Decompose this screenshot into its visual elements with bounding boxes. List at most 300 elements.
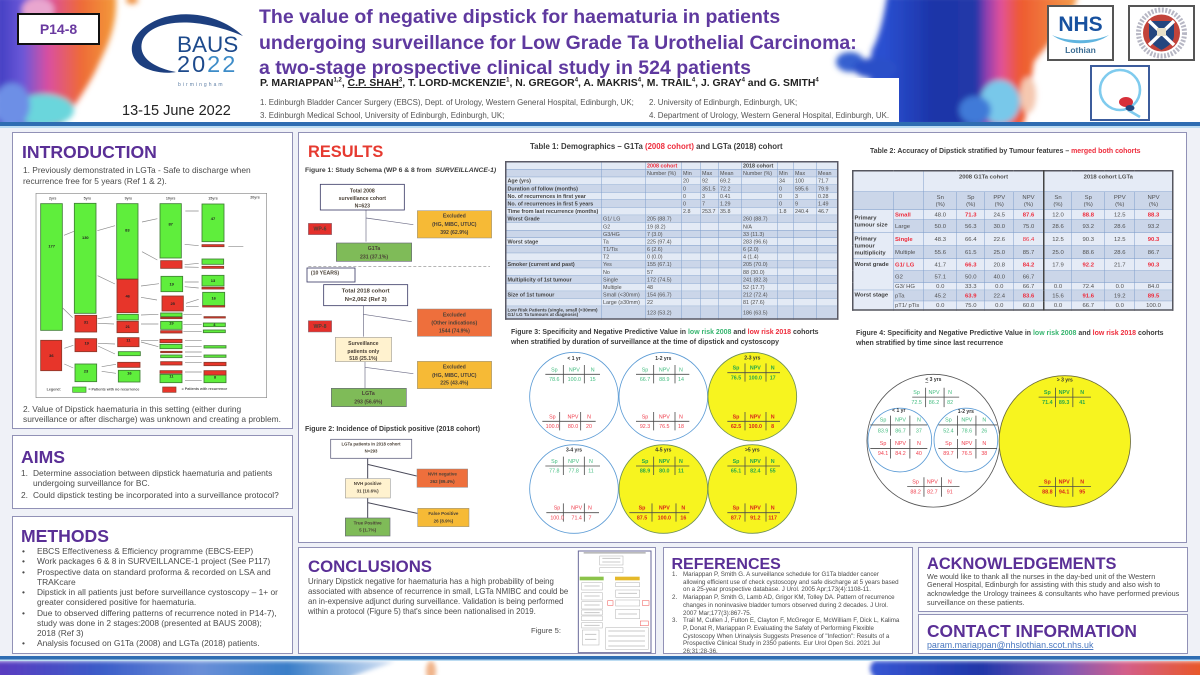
chart: recurrence flow diagram: 11 — [169, 373, 174, 378]
text: bullet dots — [22, 546, 25, 648]
figure 1: study schema title: Figure 1: Study Schema (WP 6 & 8 from SURVEILLANCE-1) — [305, 167, 496, 174]
circle: 3-4 years: N — [588, 506, 592, 512]
circle: 1-2 years: N — [982, 441, 986, 447]
figure 2: incidence flowchart: 5 (1.7%) — [359, 528, 377, 533]
circle: 1-2 years: 52.4 — [943, 429, 954, 435]
figure 4: time since recurrence circles — [866, 374, 1131, 508]
circle: over 5 years (highlighted): 87.7 — [731, 515, 741, 521]
circle: 4-5 years (highlighted): Sp — [642, 459, 649, 465]
text: acknowledgements: surveillance on these patients. — [927, 598, 1025, 607]
table 2: dipstick accuracy: 0.0 — [1116, 302, 1124, 308]
circle: up to 3 years: N — [948, 479, 952, 485]
table 2: dipstick accuracy: 61.5 — [965, 249, 976, 255]
text: bullet dots: • — [22, 556, 25, 566]
table 1: demographics: 1.49 — [818, 200, 829, 207]
table 1: demographics: 6 (2.0) — [743, 246, 759, 252]
text: methods list — [37, 546, 278, 648]
text: methods list: greater considered positive for haematuria. — [37, 597, 196, 607]
table 1: demographics: 225 (97.4) — [647, 238, 672, 245]
circle: 2-3 years (highlighted): 76.5 — [731, 375, 741, 381]
table 2: dipstick accuracy: 90.3 — [1083, 236, 1094, 242]
circle: 1-2 years: NPV — [961, 441, 973, 447]
table 2: dipstick accuracy: (%) — [995, 201, 1004, 207]
table 2: dipstick accuracy: 88.3 — [1148, 211, 1159, 218]
title: undergoing surveillance for Low Grade Ta Urothelial Carcinoma: — [259, 32, 857, 54]
text: aims list: 1. — [21, 468, 28, 478]
table 1: demographics: 283 (96.6) — [743, 238, 768, 245]
chart: recurrence flow diagram: = Patients with no recurrence — [88, 387, 139, 391]
circle: under 1 year: 37 — [916, 429, 922, 435]
table 1: demographics: Ta — [603, 238, 609, 245]
circle: 1-2 years — [619, 352, 708, 441]
chart: recurrence flow diagram: 21 — [125, 324, 130, 328]
circle: 2-3 years (highlighted) — [708, 352, 797, 441]
figure 1: study schema flowchart: (10 YEARS) — [311, 271, 339, 277]
table 2: dipstick accuracy: 66.7 — [1023, 273, 1034, 280]
table 1: demographics: 33 (11.3) — [743, 231, 764, 237]
text: methods list: Prospective data on standard proforma & recorded on LSA and — [37, 566, 271, 576]
text: figure 5 label: Figure 5: — [531, 626, 561, 635]
table 2: dipstick accuracy: 28.6 — [1052, 223, 1064, 229]
circle: under 1 year: NPV — [568, 414, 579, 420]
text: bullet dots: • — [22, 587, 25, 597]
table 2: dipstick accuracy: 0.0 — [936, 283, 944, 290]
circle: under 1 year — [530, 352, 618, 441]
table 2: dipstick accuracy: 22.4 — [994, 292, 1005, 299]
table 1: demographics: 0 — [683, 185, 686, 191]
table 2: dipstick accuracy: 66.7 — [1083, 302, 1094, 308]
circle: 4-5 years (highlighted): N — [681, 506, 685, 512]
title: The value of negative dipstick for haematuria in patients — [259, 6, 780, 28]
table 2: dipstick accuracy: NPV — [1147, 194, 1160, 200]
table 1: demographics: 0 — [683, 200, 686, 207]
table 2: dipstick accuracy: Worst grade — [854, 261, 889, 268]
table 1: demographics: Number (%) — [743, 170, 772, 176]
table 1: demographics: Large (≥30mm) — [603, 299, 640, 305]
text: methods list: 2018 (Ref 3) — [37, 628, 84, 638]
text: conclusions: within a protocol (Figure 5) that's since been nationalised in 2019. — [308, 607, 536, 616]
circle: 4-5 years (highlighted): NPV — [659, 459, 670, 465]
circle: up to 3 years: 88.2 — [910, 489, 921, 495]
circle: under 1 year: Sp — [880, 418, 886, 424]
text: aims list — [21, 468, 279, 500]
table 1: demographics: 172 (74.5) — [647, 276, 672, 283]
heading: acknowledgements: ACKNOWLEDGEMENTS — [927, 555, 1116, 573]
text: references list: changes in noninvasive bladder tumors observed during 2 decades. J Urol. — [683, 602, 888, 609]
table 1: demographics: T2 — [603, 254, 609, 260]
table 1: demographics: 46.7 — [818, 208, 829, 214]
circle: 2-3 years (highlighted): 17 — [770, 375, 776, 381]
table 1: demographics: 154 (66.7) — [647, 292, 672, 298]
circle: over 5 years (highlighted): 82.4 — [750, 469, 761, 475]
circle: 1-2 years: 38 — [981, 451, 987, 457]
table 2: dipstick accuracy: G1/ LG — [895, 261, 914, 268]
chart: recurrence flow diagram: 130 — [81, 234, 89, 240]
table 2: dipstick accuracy: 85.7 — [1023, 249, 1034, 255]
text: bullet dots: • — [22, 638, 25, 648]
table 1: demographics: 19 (8.2) — [647, 223, 666, 229]
footer rule and paint splash band — [0, 656, 1200, 675]
BAUS 2022 logo: 2022 — [177, 51, 237, 77]
circle: under 1 year — [868, 408, 932, 472]
table 2: dipstick accuracy: (%) — [966, 201, 975, 207]
figure 2: incidence flowchart: 262 (89.4%) — [430, 479, 455, 484]
table 1: demographics: 0 — [683, 193, 686, 199]
text: reference numbers: 3. — [672, 617, 677, 624]
BAUS 2022 logo: birmingham — [178, 82, 225, 88]
table 2: dipstick accuracy: (%) — [1024, 201, 1033, 207]
circle: 3-4 years: NPV — [568, 459, 580, 465]
table 1: demographics: 6 (2.6) — [647, 246, 663, 252]
table 2: dipstick accuracy: 0.0 — [995, 283, 1003, 290]
text: methods list: Work packages 6 & 8 in SURVEILLANCE-1 project (See P117) — [37, 556, 270, 566]
table 2: dipstick accuracy: 90.3 — [1148, 236, 1159, 242]
text: methods list: TRAKcare — [37, 577, 76, 587]
circle: 1-2 years: N — [679, 414, 683, 420]
table 2: dipstick accuracy: 75.0 — [965, 302, 976, 308]
figure 2: incidence flowchart: True Positive — [354, 520, 382, 525]
table 2: dipstick accuracy: Primary tumour multiplicity — [854, 236, 886, 256]
circle: up to 3 years: N — [948, 390, 952, 396]
table 2: dipstick accuracy: 55.6 — [935, 249, 946, 255]
table 2: dipstick accuracy: 28.6 — [1114, 249, 1125, 255]
table 1: demographics: 7 — [702, 200, 705, 207]
table 1: demographics: Duration of follow (months) — [508, 185, 578, 191]
chart: recurrence flow diagram: 16 — [127, 370, 132, 375]
text: intro point 1: recurrence free for 5 years (Ref 1 & 2). — [23, 176, 167, 186]
table 1: demographics: 0 — [779, 185, 782, 191]
circle: over 5 years (highlighted): Sp — [733, 506, 740, 512]
table 1: demographics: 351.5 — [702, 185, 716, 191]
circle: under 1 year: 20 — [586, 424, 592, 430]
figure 3 title: Figure 3: Specificity and Negative Predictive Value in low risk 2008 and low risk 2018 cohorts — [511, 329, 819, 336]
circle: over 3 years (highlighted): NPV — [1059, 479, 1070, 485]
table 1: demographics: 0 — [779, 200, 782, 207]
circle: 3-4 years: 77.8 — [568, 469, 579, 475]
panel: contact information — [918, 614, 1188, 654]
circle: under 1 year: N — [917, 418, 921, 424]
circle: under 1 year: N — [591, 367, 595, 373]
table 1: demographics: 205 (70.0) — [743, 261, 768, 267]
circle: 3-4 years: 71.4 — [571, 515, 582, 521]
table 1: demographics: No — [603, 269, 610, 275]
BAUS 2022 logo — [122, 14, 243, 119]
chart: recurrence flow diagram: 9yrs — [124, 196, 132, 200]
figure 1: study schema flowchart: N=623 — [355, 203, 370, 209]
table 2: dipstick accuracy: 63.9 — [965, 292, 976, 299]
figure 1: study schema flowchart: 293 (56.6%) — [354, 399, 383, 405]
panel: conclusions — [298, 547, 656, 654]
circle: 3-4 years: 77.8 — [549, 469, 560, 475]
chart: recurrence flow diagram: 87 — [168, 221, 173, 226]
circle: over 3 years (highlighted): 95 — [1079, 489, 1085, 495]
table 2: dipstick accuracy: G2 — [895, 273, 903, 280]
text: contact email: param.mariappan@nhslothian.scot.nhs.uk — [927, 640, 1093, 650]
table 2: dipstick accuracy: 0.0 — [1054, 283, 1062, 290]
table 2: dipstick accuracy: pT1/ pTis — [895, 302, 919, 308]
circle: 4-5 years (highlighted): 87.5 — [637, 515, 647, 521]
chart: recurrence flow diagram — [36, 193, 267, 398]
circle: over 5 years (highlighted): 65.1 — [731, 469, 741, 475]
table 2: dipstick accuracy: 12.5 — [1114, 211, 1125, 218]
table 1: demographics: 35.8 — [720, 208, 731, 214]
circle: 3-4 years: 7 — [589, 515, 592, 521]
table 1: demographics: 595.6 — [795, 185, 809, 191]
circle: 1-2 years — [934, 408, 998, 472]
table 1: demographics: 81 (27.6) — [743, 299, 765, 305]
circle: 4-5 years (highlighted): 4-5 yrs — [655, 447, 672, 453]
circle: over 5 years (highlighted): 55 — [770, 469, 776, 475]
table 2: dipstick accuracy: (%) — [936, 201, 945, 207]
figure 1: study schema flowchart: patients only — [347, 349, 379, 355]
table 2: dipstick accuracy: 88.6 — [1083, 249, 1094, 255]
table 2: dipstick accuracy: 41.7 — [935, 261, 946, 268]
circle: up to 3 years: Sp — [912, 479, 919, 485]
circle: 2-3 years (highlighted): 8 — [771, 424, 774, 430]
table 2: dipstick accuracy: Large — [895, 223, 910, 229]
circle: 1-2 years: Sp — [642, 367, 648, 373]
circle: 3-4 years: 100.0 — [550, 515, 564, 521]
table 2: dipstick accuracy: 93.2 — [1083, 223, 1094, 229]
table 1: demographics: 0 (0.0) — [647, 254, 663, 260]
circle: over 3 years (highlighted): Sp — [1044, 390, 1052, 396]
text: reference numbers: 2. — [672, 594, 677, 601]
circle: 4-5 years (highlighted): 80.0 — [659, 469, 670, 475]
figure 1: study schema flowchart: Excluded — [443, 313, 466, 319]
text: references list — [683, 571, 900, 655]
table 2: dipstick accuracy: 15.6 — [1052, 292, 1064, 299]
table 2: dipstick accuracy: 89.5 — [1148, 292, 1159, 299]
text: references list: Prospective Clinical Study in 2350 patients. Eur Urol Open Sci. 2021 Jul — [683, 640, 880, 647]
table 1 title: Table 1: Demographics – G1Ta (2008 cohort) and LGTa (2018) cohort — [530, 142, 783, 151]
table 1: demographics: Size of 1st tumour — [508, 292, 554, 298]
table 1: demographics: 1.8 — [779, 208, 787, 214]
text: references list: P, Donat R, Mariappan P. Evaluating the Safety of Performing Flexible — [683, 625, 874, 632]
circle: up to 3 years: 91 — [947, 489, 953, 495]
circle: 1-2 years: 66.7 — [640, 377, 650, 383]
chart: recurrence flow diagram: 15yrs — [208, 196, 217, 200]
text: acknowledgements: We would like to thank all the nurses in the day-bed unit of the Western — [927, 572, 1155, 580]
heading: references: REFERENCES — [672, 556, 781, 572]
circle: 3-4 years: Sp — [554, 506, 560, 512]
circle: over 3 years (highlighted): 71.4 — [1042, 400, 1053, 406]
table 2 title: Table 2: Accuracy of Dipstick stratified by Tumour features – merged both cohorts — [870, 148, 1141, 155]
table 2: dipstick accuracy: 45.2 — [935, 292, 946, 299]
logo: NHS Lothian — [1047, 5, 1114, 61]
circle: 3-4 years: 3-4 yrs — [566, 447, 582, 453]
table 1: demographics: Number (%) — [647, 170, 676, 176]
circle: 1-2 years: Sp — [945, 418, 952, 424]
affiliations: 2. University of Edinburgh, Edinburgh, UK; — [649, 98, 797, 107]
logo: NHS Lothian: Lothian — [1065, 45, 1096, 55]
text: intro point 2: 2. Value of Dipstick haematuria in this setting (either during — [23, 404, 241, 414]
table 2: dipstick accuracy: 88.8 — [1083, 211, 1094, 218]
table 2: dipstick accuracy: Sn — [1054, 194, 1062, 200]
figure 1: study schema flowchart: Excluded — [443, 365, 466, 371]
header band with paint splashes — [0, 0, 1200, 122]
figure 1: study schema flowchart: WP-8 — [314, 324, 327, 330]
table 1: demographics: Small (<30mm) — [603, 292, 640, 298]
table 2: dipstick accuracy: 86.4 — [1023, 236, 1034, 242]
text: intro point 2 — [23, 404, 281, 424]
text: reference numbers — [672, 571, 677, 624]
table 1: demographics: Worst stage — [508, 238, 538, 245]
panel: results — [298, 132, 1187, 543]
table 2: dipstick accuracy: 87.6 — [1023, 211, 1034, 218]
text: acknowledgements: General Hospital, Edinburgh for assisting with this study and also wish to — [927, 580, 1160, 589]
table 2: dipstick accuracy: 24.5 — [994, 211, 1005, 218]
circle: under 1 year: N — [917, 441, 921, 447]
table 2: dipstick accuracy: 22.6 — [994, 236, 1005, 242]
panel: aims — [12, 435, 293, 509]
figure 1: study schema flowchart: G1Ta — [368, 246, 380, 252]
figure 1: study schema flowchart: (Other indications) — [431, 320, 478, 326]
text: acknowledgements — [927, 572, 1179, 607]
circle: up to 3 years — [867, 374, 1000, 507]
table 2: dipstick accuracy: 84.2 — [1023, 261, 1034, 268]
table 1: demographics: 9 — [795, 200, 798, 207]
table 1: demographics: 2008 cohort — [647, 163, 677, 169]
circle: 1-2 years: 78.6 — [962, 429, 972, 435]
heading: contact information: CONTACT INFORMATION — [927, 621, 1137, 641]
table 1: demographics: Min — [779, 170, 788, 176]
table 1: demographics: Worst Grade — [508, 216, 540, 222]
text: intro point 1: 1. Previously demonstrated in LGTa - Safe to discharge when — [23, 165, 251, 175]
table 2: dipstick accuracy: 0.0 — [1054, 302, 1062, 308]
table 1: demographics: No. of recurrences in first year — [508, 193, 586, 199]
circle: 1-2 years: NPV — [659, 414, 670, 420]
circle: under 1 year: 94.1 — [878, 451, 888, 457]
table 2: dipstick accuracy: PPV — [1114, 194, 1126, 200]
chart: recurrence flow diagram: 13 — [210, 278, 215, 282]
circle: over 3 years (highlighted): 89.3 — [1059, 400, 1069, 406]
table 2: dipstick accuracy: 56.3 — [965, 223, 976, 229]
figure 5: protocol thumbnail — [578, 550, 652, 654]
circle: 1-2 years: 26 — [981, 429, 987, 435]
circle: under 1 year: 84.2 — [895, 451, 906, 457]
white box for authors — [255, 78, 899, 122]
circle: under 1 year: 100.0 — [568, 377, 581, 383]
table 2: dipstick accuracy: 12.5 — [1052, 236, 1064, 242]
table 1: demographics: 186 (63.5) — [743, 309, 768, 315]
chart: recurrence flow diagram: 11 — [126, 337, 131, 342]
circle: 1-2 years: 1-2 yrs — [958, 409, 974, 415]
circle: under 1 year: < 1 yr — [892, 408, 905, 414]
table 2: dipstick accuracy — [852, 170, 1174, 311]
table 2: dipstick accuracy: 83.6 — [1023, 292, 1034, 299]
table 2: dipstick accuracy: 66.3 — [965, 261, 976, 268]
circle: over 3 years (highlighted) — [999, 376, 1131, 507]
circle: 4-5 years (highlighted): 16 — [680, 515, 686, 521]
table 2: dipstick accuracy: 20.8 — [994, 261, 1005, 268]
text: references list: Cystoscopy When Urinalysis Suggests Presence of "Infection": Results of a — [683, 633, 889, 640]
circle: 1-2 years: N — [679, 367, 683, 373]
figure 1: study schema flowchart: Surveillance — [348, 341, 379, 347]
table 1: demographics: 253.7 — [702, 208, 716, 214]
table 2: dipstick accuracy: Sn — [937, 194, 944, 200]
text: methods list: EBCS Effectiveness & Efficiency programme (EBCS-EEP) — [37, 546, 253, 556]
circle: 3-4 years: 11 — [588, 469, 594, 475]
circle: up to 3 years: Sp — [913, 390, 920, 396]
circle: 2-3 years (highlighted): Sp — [733, 366, 740, 372]
panel: introduction — [12, 132, 293, 429]
table 2: dipstick accuracy: 84.0 — [1148, 283, 1159, 290]
table 2: dipstick accuracy: 66.7 — [1023, 283, 1034, 290]
circle: 2-3 years (highlighted): NPV — [750, 414, 761, 420]
circle: 1-2 years: 76.5 — [659, 424, 670, 430]
chart: recurrence flow diagram: 36 — [49, 352, 54, 358]
circle: over 3 years (highlighted): 94.1 — [1059, 489, 1069, 495]
table 2: dipstick accuracy: 91.6 — [1083, 292, 1094, 299]
circle: over 3 years (highlighted): Sp — [1044, 479, 1052, 485]
table 2: dipstick accuracy: 0.0 — [936, 302, 944, 308]
circle: up to 3 years: NPV — [927, 479, 938, 485]
table 1: demographics: 79.9 — [818, 185, 829, 191]
circle: 2-3 years (highlighted): 100.0 — [749, 375, 762, 381]
panel: methods — [12, 516, 293, 654]
figure 1: study schema flowchart: surveillance cohort — [339, 196, 386, 202]
circle: 1-2 years: 89.7 — [943, 451, 954, 457]
table 2: dipstick accuracy: 19.2 — [1114, 292, 1125, 299]
circle: 1-2 years: N — [982, 418, 986, 424]
table 2: dipstick accuracy: Worst stage — [854, 291, 888, 298]
figure 4 title — [856, 330, 1164, 347]
circle: over 3 years (highlighted): N — [1080, 390, 1084, 396]
circle: 1-2 years: Sp — [642, 414, 648, 420]
circle: 4-5 years (highlighted): 11 — [678, 469, 684, 475]
circle: 4-5 years (highlighted): 88.9 — [640, 469, 650, 475]
figure 3 title — [511, 328, 819, 346]
chart: recurrence flow diagram: 10yrs — [165, 196, 175, 200]
affiliations: 4. Department of Urology, Western General Hospital, Edinburgh, UK. — [649, 111, 889, 120]
table 2: dipstick accuracy: 48.3 — [935, 236, 946, 242]
figure 1: study schema flowchart: N=2,062 (Ref 3) — [345, 297, 387, 303]
text: methods list: Analysis focused on G1Ta (2008) and LGTa (2018) patients. — [37, 638, 260, 648]
table 2: dipstick accuracy: (%) — [1115, 201, 1124, 207]
circle: 1-2 years: 76.5 — [962, 451, 972, 457]
circle: under 1 year: NPV — [569, 367, 580, 373]
circle: under 1 year: Sp — [551, 367, 558, 373]
figure 3 title: when stratified by duration of surveillance at the time of dipstick and cystoscopy — [511, 339, 779, 346]
table 1: demographics: 71.7 — [818, 178, 829, 184]
table 2: dipstick accuracy: 30.0 — [994, 223, 1005, 229]
text: bullet dots: • — [22, 546, 25, 556]
figure 1: study schema flowchart: Total 2018 cohort — [342, 289, 390, 295]
table 2: dipstick accuracy: Single — [895, 236, 913, 242]
circle: 1-2 years: 14 — [678, 377, 684, 383]
text: aims list: Could dipstick testing be incorporated into a surveillance protocol? — [33, 490, 279, 500]
table 1: demographics: 69.2 — [720, 178, 731, 184]
table 1: demographics: 0.28 — [818, 193, 829, 199]
affiliations — [260, 98, 889, 120]
circle: 4-5 years (highlighted) — [619, 445, 708, 533]
circle: 1-2 years: NPV — [961, 418, 973, 424]
table 2: dipstick accuracy: PPV — [993, 194, 1005, 200]
table 1: demographics: Age (yrs) — [508, 178, 531, 184]
table 2: dipstick accuracy: 12.5 — [1114, 236, 1125, 242]
chart: recurrence flow diagram: 19 — [169, 320, 174, 325]
circle: over 5 years (highlighted): NPV — [750, 506, 761, 512]
circle: over 5 years (highlighted) — [708, 445, 797, 533]
table 1: demographics: 3 — [702, 193, 705, 199]
figure 1: study schema flowchart: (HG, MIBC, UTUC) — [432, 222, 477, 228]
logo: University of Edinburgh — [1128, 5, 1195, 61]
circle: up to 3 years: < 3 yrs — [925, 377, 942, 383]
text: conclusions: associated with absence of recurrence in small, LGTa NMIBC and could be — [308, 587, 568, 596]
table 1: demographics: G3/HG — [603, 231, 620, 237]
table 2: dipstick accuracy: Small — [895, 211, 911, 218]
circle: under 1 year: 83.9 — [878, 429, 888, 435]
